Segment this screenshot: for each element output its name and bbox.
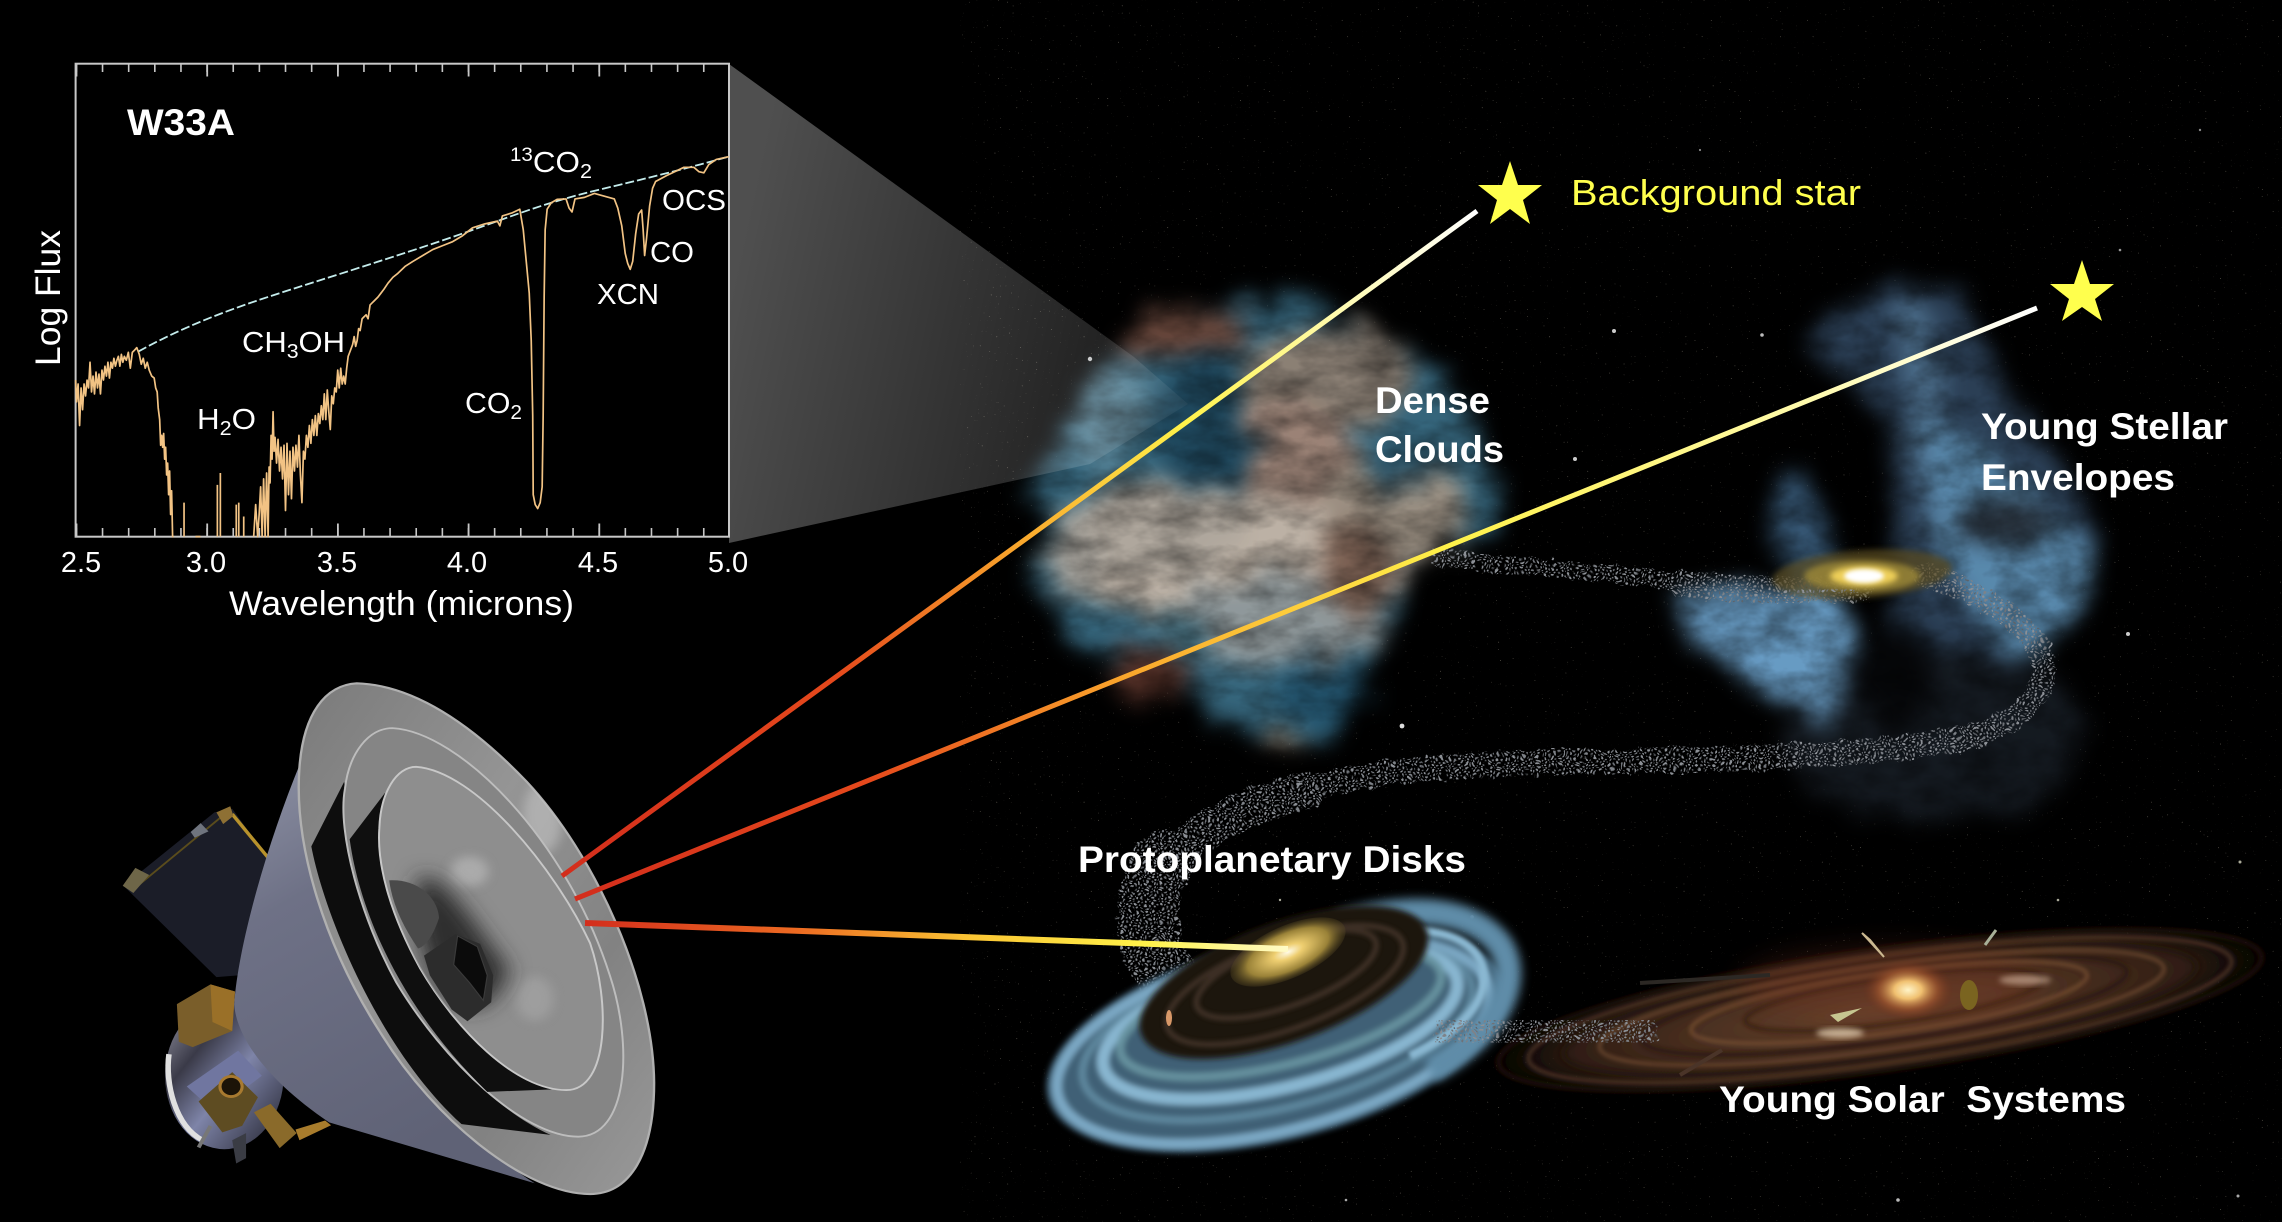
sight line 2 (575, 308, 2037, 899)
dark inner disk (1121, 874, 1447, 1091)
x axis tick labels: 3.0 (186, 547, 226, 579)
molecule labels: 2 (220, 418, 232, 440)
particle stream (1148, 558, 2043, 990)
molecule labels: 3 (287, 341, 299, 363)
background star 2 (2050, 260, 2114, 321)
solar panel (123, 806, 271, 977)
background star 1 (1478, 161, 1542, 224)
sight line 3 (585, 923, 1288, 949)
outer blue spiral (1023, 886, 1529, 1195)
x axis tick labels: 3.5 (317, 547, 357, 579)
spacecraft (123, 683, 654, 1194)
x axis tick labels: 4.5 (578, 547, 618, 579)
baffle shading (415, 856, 554, 1021)
x axis tick labels: 4.0 (447, 547, 487, 579)
label: young solar systems: Young Solar Systems (1719, 1079, 2126, 1120)
molecule labels: O (232, 404, 256, 436)
label: background star: Background star (1571, 172, 1861, 213)
W33A spectrum (76, 157, 729, 537)
molecule labels (197, 145, 726, 440)
dense cloud (1024, 303, 1493, 750)
label: dense clouds: Clouds (1375, 429, 1504, 470)
x axis tick labels (61, 547, 748, 579)
young solar system (1494, 926, 2266, 1096)
molecule labels: H (197, 404, 218, 436)
rim highlight (523, 782, 562, 854)
plot frame (76, 64, 729, 537)
label: young stellar envelopes (1981, 406, 2228, 498)
molecule labels: 13 (510, 145, 533, 166)
molecule labels: CO (533, 147, 580, 179)
sight line 1 (562, 211, 1477, 876)
spectrum chart (29, 64, 748, 623)
molecule labels: XCN (597, 279, 659, 311)
label: young stellar envelopes: Young Stellar (1981, 406, 2228, 447)
young stellar envelope (1680, 288, 2097, 820)
cone exterior (234, 760, 535, 1183)
molecule labels: OCS (662, 185, 726, 217)
x axis tick labels: 2.5 (61, 547, 101, 579)
outer black band (311, 782, 551, 1135)
protostar disk (1771, 544, 1953, 604)
golden core (1221, 903, 1355, 1001)
solar disk stream (1435, 1022, 1655, 1040)
inner rim (379, 767, 603, 1090)
y axis title: Log Flux (29, 230, 68, 366)
x axis title: Wavelength (microns) (229, 585, 574, 623)
grey projection wedge (729, 64, 1188, 543)
molecule labels: 2 (510, 402, 522, 424)
label: young stellar envelopes: Envelopes (1981, 457, 2175, 498)
bus (165, 984, 331, 1164)
source name: W33A (127, 102, 235, 143)
molecule labels: 2 (580, 161, 592, 183)
particle stream over protostar disk (1780, 590, 1856, 592)
starfield (960, 0, 2282, 1222)
inner black band (350, 793, 553, 1092)
molecule labels: CO (650, 237, 694, 269)
molecule labels: CH (242, 327, 284, 359)
protoplanetary disk (1023, 874, 1529, 1195)
x axis tick labels: 5.0 (708, 547, 748, 579)
molecule labels: CO (465, 388, 508, 420)
outer rim (299, 683, 654, 1194)
label: dense clouds (1375, 380, 1504, 470)
second rim (343, 728, 623, 1137)
label: protoplanetary disks: Protoplanetary Disks (1078, 839, 1466, 880)
continuum dashed line (138, 157, 729, 352)
label: dense clouds: Dense (1375, 380, 1490, 421)
telescope aperture (389, 880, 493, 1021)
molecule labels: OH (299, 327, 345, 359)
